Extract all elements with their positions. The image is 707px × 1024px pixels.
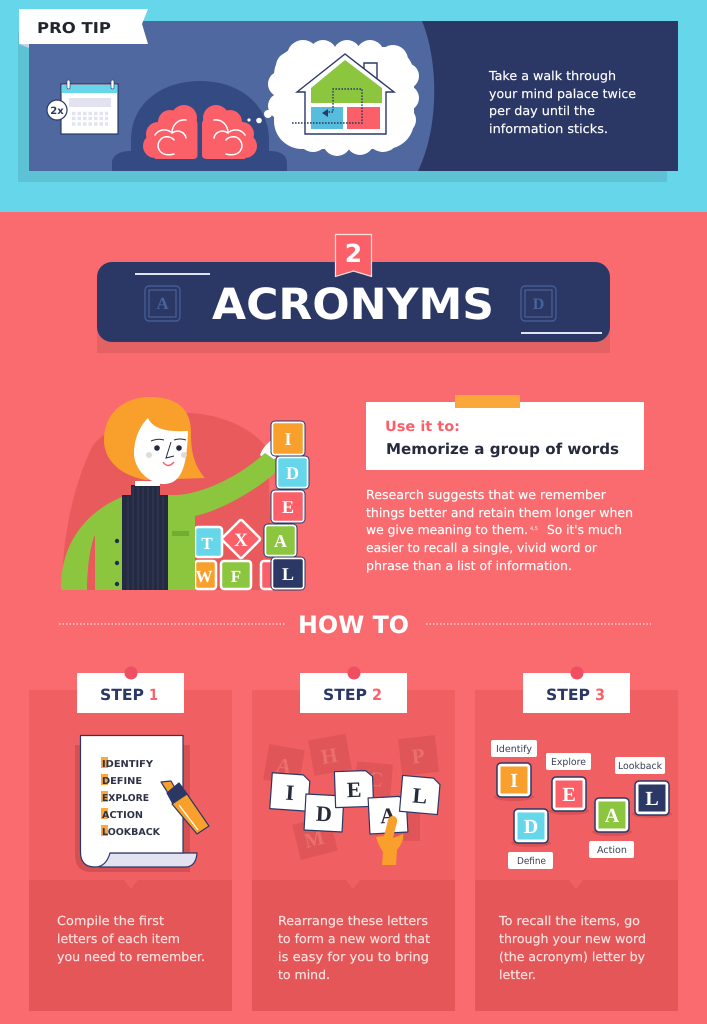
icon: letter tile D: D <box>533 296 544 313</box>
icon: highlighter <box>161 781 209 834</box>
card: use it to: Use it to: <box>385 419 460 435</box>
block F <box>221 561 251 589</box>
illustration: ideal tiles with labels: Lookback <box>618 761 662 772</box>
illustration: rearranged letter cards: A <box>379 803 397 828</box>
step 2 label: STEP <box>323 686 367 704</box>
panel: pro tip background <box>0 0 707 212</box>
illustration: ideal tiles with labels: D <box>524 816 538 838</box>
illustration: ideal tiles with labels: I <box>510 770 518 792</box>
text: pro tip advice <box>488 68 636 136</box>
illustration: rearranged letter cards: P <box>410 743 426 769</box>
pro tip ribbon <box>19 9 148 48</box>
caption: step 1 <box>57 913 205 964</box>
number ribbon 2: 2 <box>345 239 362 268</box>
illustration: paper list with highlighter <box>75 736 209 872</box>
caption: step 3 <box>498 913 646 982</box>
caption: step 2: to form a new word that <box>278 931 430 946</box>
block L <box>271 557 305 590</box>
illustration: paper list with highlighter: DEFINE <box>102 776 142 787</box>
illustration: rearranged letter cards: E <box>346 777 362 802</box>
illustration: ideal tiles with labels <box>491 740 672 869</box>
block L: L <box>282 564 294 584</box>
card: use it to: Memorize a group of words <box>386 440 619 458</box>
caption: step 2: Rearrange these letters <box>278 913 428 928</box>
icon: calendar twice per day <box>47 80 118 134</box>
panel: step 3 <box>475 666 678 1011</box>
block D <box>276 456 309 489</box>
text: research explanation <box>366 487 633 573</box>
illustration: ideal tiles with labels: L <box>645 788 659 810</box>
illustration: ideal tiles with labels: Action <box>597 845 627 856</box>
step 3 label <box>523 666 630 713</box>
text: research explanation: Research suggests that we remember <box>366 487 607 502</box>
caption: step 1: Compile the first <box>57 913 164 928</box>
illustration: paper list with highlighter: ACTION <box>102 810 143 821</box>
block E <box>271 490 305 523</box>
block I <box>271 421 305 456</box>
panel: step 2 <box>252 666 455 1011</box>
block W <box>195 561 216 589</box>
caption: step 1: you need to remember. <box>57 949 205 964</box>
illustration: rearranged letter cards: C <box>367 767 384 792</box>
block T <box>195 527 222 557</box>
block X: X <box>234 530 248 551</box>
illustration: rearranged letter cards: L <box>412 782 428 809</box>
step 3 label: STEP <box>546 686 590 704</box>
icon: calendar twice per day: 2x <box>50 106 64 117</box>
caption: step 3: through your new word <box>499 931 646 946</box>
illustration: ideal tiles with labels: Define <box>517 856 546 867</box>
text: research explanation: phrase than a list of information. <box>366 558 572 573</box>
text: pro tip advice: per day until the <box>489 103 595 118</box>
pro tip ribbon: PRO TIP <box>37 19 111 37</box>
caption: step 3: letter. <box>499 967 536 982</box>
text: research explanation: things better and retain them longer when <box>366 505 633 520</box>
step 2 label: 2 <box>372 686 382 704</box>
step 3 label: 3 <box>595 686 605 704</box>
caption: step 2: to mind. <box>278 967 330 982</box>
illustration: ideal tiles with labels: E <box>562 784 576 806</box>
heading banner: acronyms: ACRONYMS <box>212 280 494 330</box>
icon: letter tile A <box>145 286 180 321</box>
illustration: rearranged letter cards: M <box>302 825 327 853</box>
icon: letter tile D <box>521 286 556 321</box>
text: pro tip advice: Take a walk through <box>488 68 616 83</box>
block X <box>221 519 261 559</box>
text: research explanation: easier to recall a single, vivid word or <box>366 540 598 555</box>
panel: step 1 <box>29 666 232 1011</box>
icon: hand holding letter <box>376 816 403 865</box>
caption: step 1: letters of each item <box>57 931 180 946</box>
block W: W <box>196 567 212 586</box>
illustration: rearranged letter cards: I <box>285 780 295 805</box>
icon: thought cloud with mind palace house <box>268 40 419 156</box>
text: research explanation: we give meaning to them. <box>366 522 528 537</box>
caption: step 2: is easy for you to bring <box>278 949 429 964</box>
illustration: rearranged letter cards: A <box>274 753 294 779</box>
block T: T <box>201 534 213 553</box>
step 1 label: STEP <box>100 686 144 704</box>
text: research explanation: 4,5 <box>530 526 538 532</box>
caption: step 3: To recall the items, go <box>498 913 640 928</box>
step 1 label: 1 <box>149 686 158 704</box>
block A: A <box>274 531 287 551</box>
block I: I <box>284 429 292 449</box>
icon: brain with thought bubbles <box>112 81 287 171</box>
illustration: rearranged letter cards <box>263 734 440 865</box>
text: pro tip advice: your mind palace twice <box>489 86 636 101</box>
heading banner: acronyms <box>97 262 610 353</box>
illustration: ideal tiles with labels: Identify <box>496 744 532 755</box>
illustration: rearranged letter cards: D <box>315 801 333 826</box>
illustration: paper list with highlighter: IDENTIFY <box>102 759 153 770</box>
illustration: rearranged letter cards: H <box>319 743 339 769</box>
icon: letter tile A: A <box>156 294 169 313</box>
heading: how to: HOW TO <box>298 611 409 639</box>
text: pro tip advice: information sticks. <box>489 121 608 136</box>
panel: acronyms section background <box>0 212 707 1024</box>
text: research explanation: So it's much <box>547 522 622 537</box>
block F: F <box>231 567 241 586</box>
block D: D <box>286 463 299 483</box>
step 2 label <box>300 666 407 713</box>
step 1 label <box>77 666 184 713</box>
illustration: ideal tiles with labels: A <box>605 805 620 827</box>
block E: E <box>282 497 294 517</box>
caption: step 3: (the acronym) letter by <box>499 949 645 964</box>
woman figure <box>61 397 276 590</box>
illustration: paper list with highlighter: LOOKBACK <box>102 827 161 838</box>
caption: step 2 <box>278 913 430 982</box>
illustration: ideal tiles with labels: Explore <box>551 757 586 768</box>
number ribbon 2 <box>336 234 372 276</box>
block A <box>264 524 297 557</box>
card: use it to <box>366 395 644 470</box>
illustration: woman stacking letter blocks <box>61 397 309 590</box>
illustration: paper list with highlighter: EXPLORE <box>102 793 149 804</box>
